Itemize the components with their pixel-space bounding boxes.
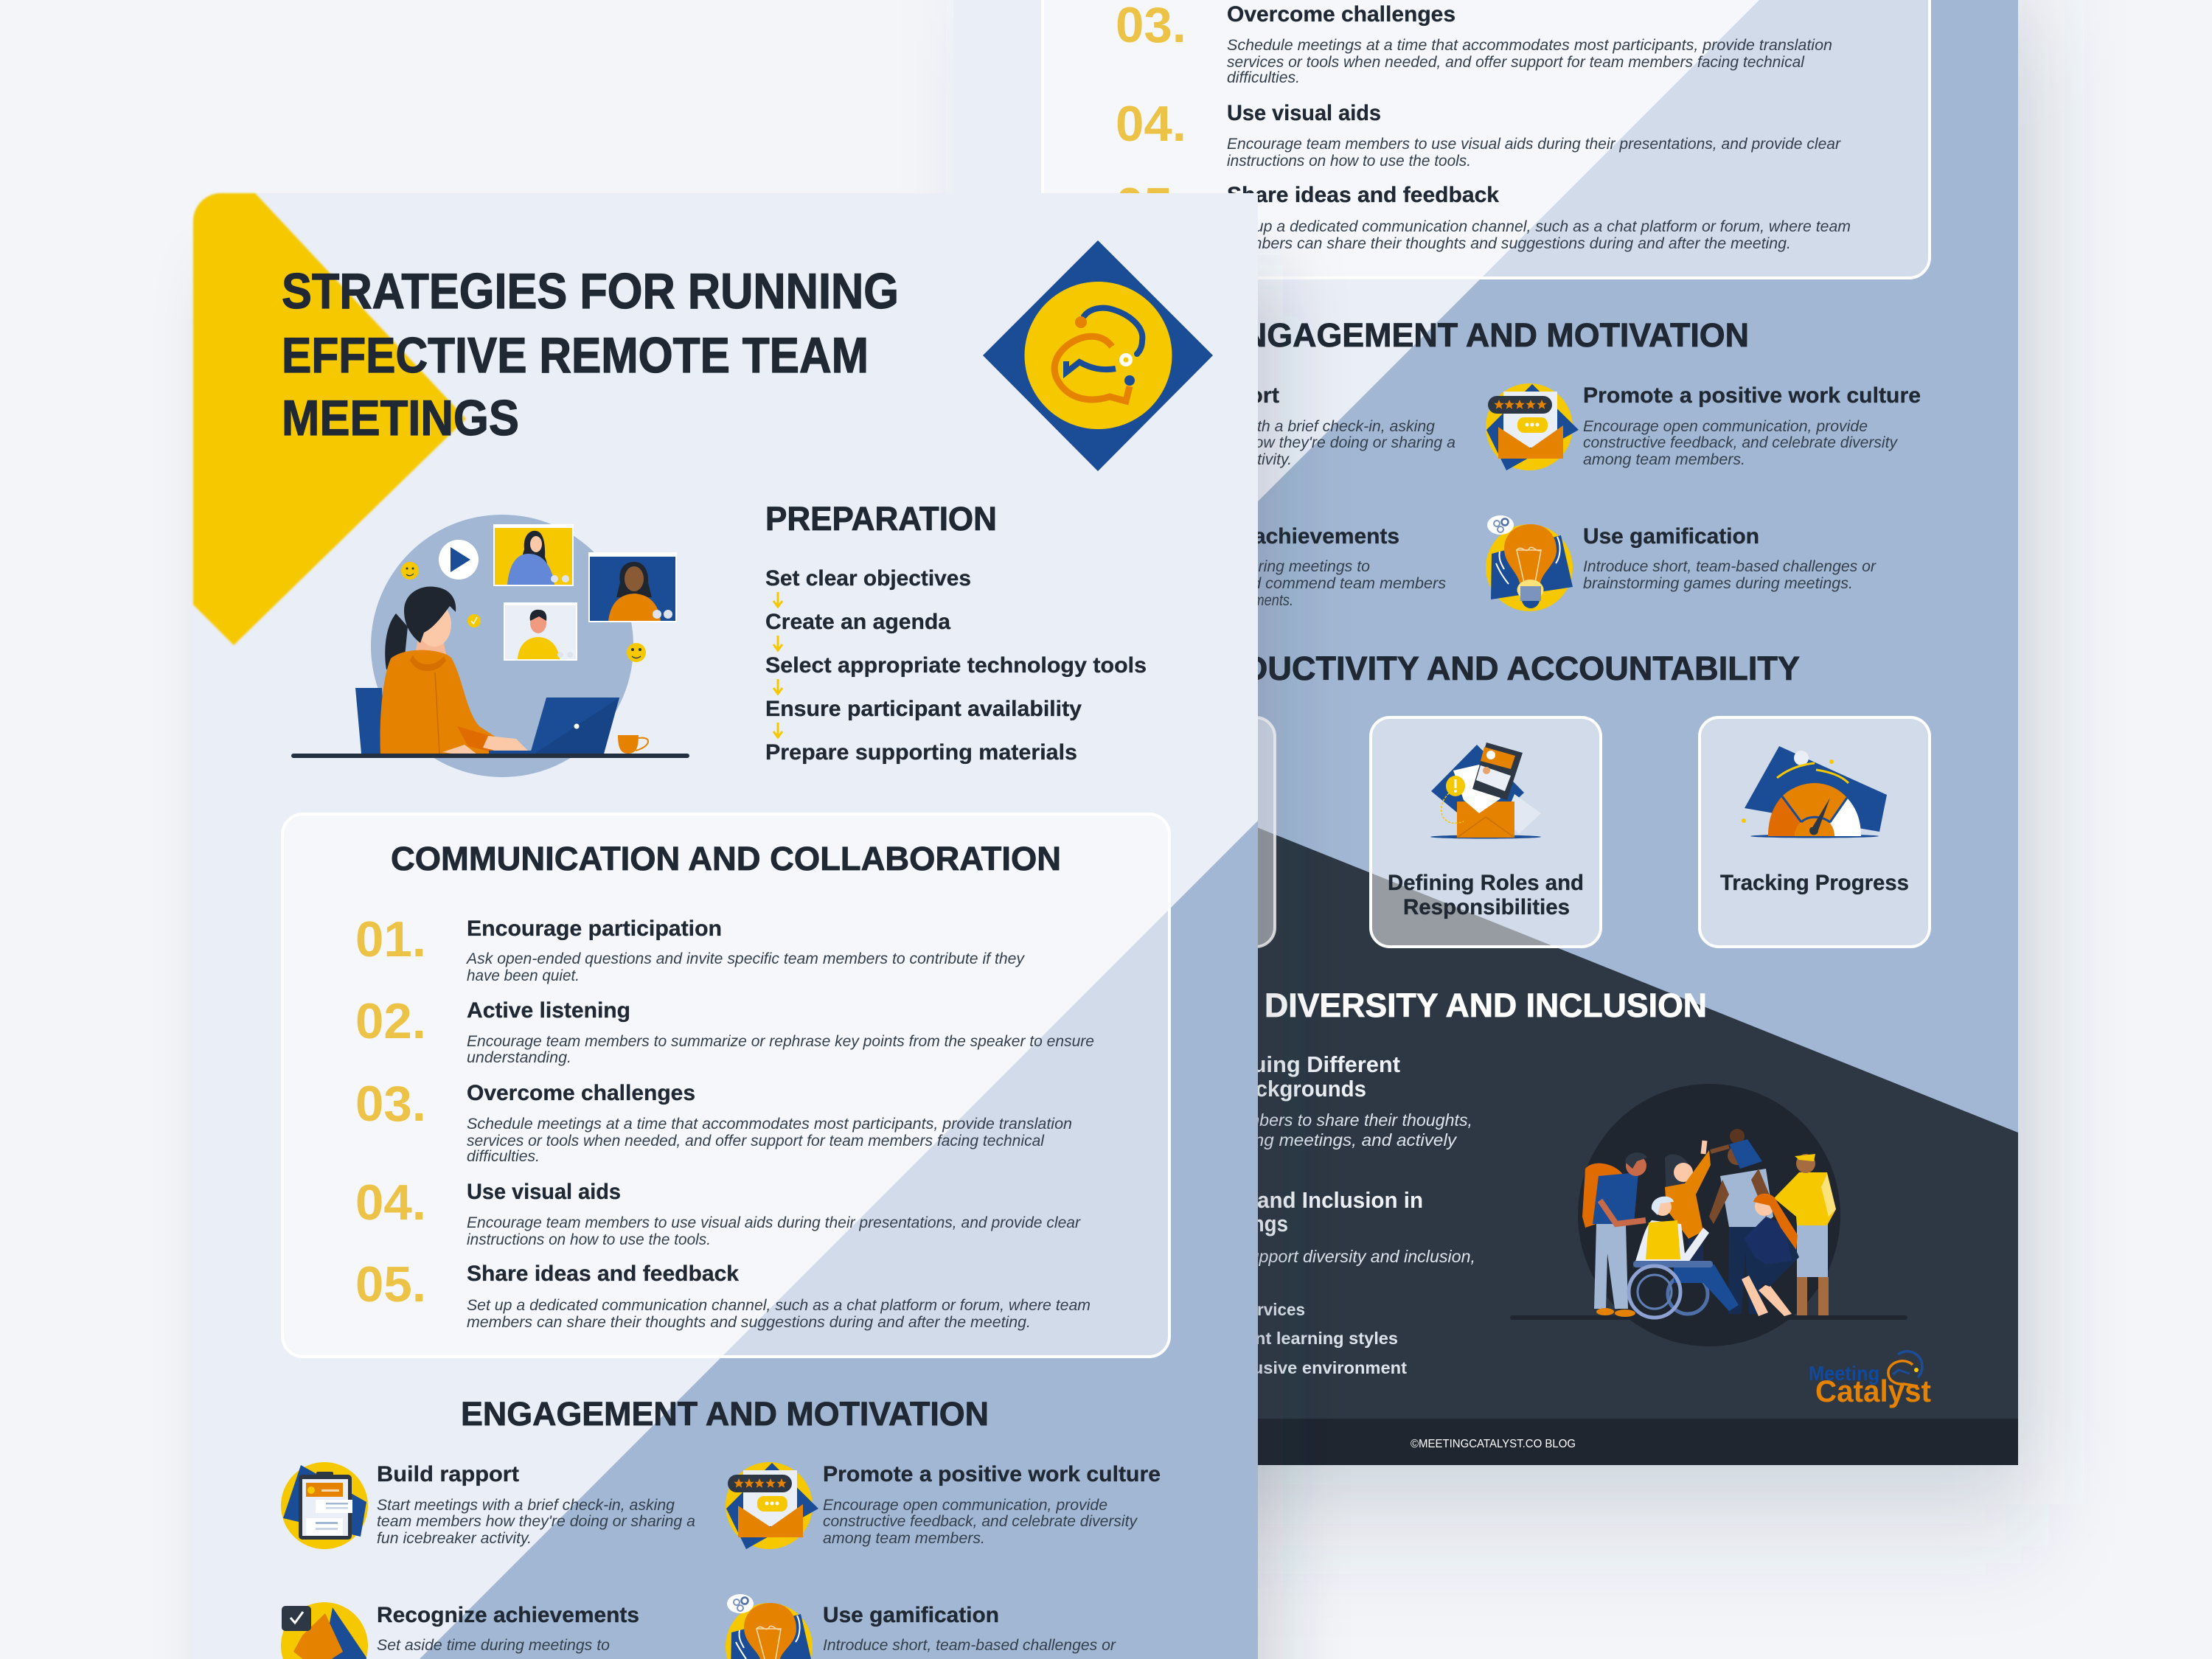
arrow — [773, 679, 782, 694]
logo: Meeting Catalyst wordmark — [1809, 1352, 1931, 1408]
icon: speedometer gauge — [1742, 746, 1887, 838]
title: STRATEGIES FOR RUNNING — [282, 263, 899, 319]
item 05: Share ideas and feedback — [467, 1262, 739, 1286]
illustration: diverse group of people — [1510, 1084, 1907, 1346]
section: back engagement and motivation: Build rapport — [1137, 383, 1279, 408]
section: engagement and motivation: ENGAGEMENT AND MOTIVATION — [461, 1395, 989, 1433]
panel: back communication and collaboration box: difficulties. — [1227, 69, 1300, 86]
item 03: Schedule meetings at a time that accommodates most participants, provide translation — [467, 1116, 1072, 1133]
section: back engagement and motivation: ENGAGEMENT AND MOTIVATION — [1221, 316, 1749, 354]
video tile: woman on blue — [588, 552, 677, 622]
section: back engagement and motivation: fun icebreaker activity. — [1137, 451, 1292, 468]
icon: check badge — [467, 614, 481, 627]
section: back engagement and motivation: Recognize achievements — [1137, 524, 1399, 549]
icon: play button — [439, 540, 479, 580]
section: preparation: Select appropriate technology tools — [765, 653, 1147, 678]
item 02: understanding. — [467, 1049, 571, 1066]
text block: valuing different backgrounds: Encourage team members to share their thoughts, — [1091, 1110, 1472, 1130]
item 01: Encourage participation — [467, 917, 722, 941]
arrow — [773, 636, 782, 650]
emoji: wink — [401, 562, 419, 580]
item: build rapport: Start meetings with a brief check-in, asking — [377, 1497, 675, 1514]
video tile: woman on yellow — [493, 524, 574, 586]
panel: back poster — [953, 0, 2018, 1465]
section: back engagement and motivation: Introduce short, team-based challenges or — [1583, 558, 1877, 575]
heading: diversity and inclusion: DIVERSITY AND INCLUSION — [1265, 987, 1707, 1024]
arrow — [773, 592, 782, 607]
panel: back communication and collaboration box: Use visual aids — [1227, 101, 1381, 125]
item: use gamification — [823, 1603, 1116, 1654]
item 05 — [355, 1256, 1091, 1331]
panel: defining roles card — [1371, 717, 1601, 947]
arrow — [773, 723, 782, 737]
panel: tracking progress card — [1700, 717, 1930, 947]
text: responsibilities label: Responsibilities — [1403, 895, 1570, 919]
item 02: 02. — [355, 993, 426, 1049]
item: recognize achievements — [377, 1603, 639, 1654]
item 01: 01. — [355, 911, 426, 967]
coffee cup — [618, 735, 648, 754]
item 01: have been quiet. — [467, 967, 580, 984]
text block: valuing different backgrounds — [1091, 1051, 1472, 1150]
section: preparation — [765, 500, 1147, 765]
item: promote a positive work culture: Promote a positive work culture — [823, 1462, 1161, 1486]
panel: back communication and collaboration box: Overcome challenges — [1227, 2, 1455, 27]
item 04: Encourage team members to use visual aids during their presentations, and provide clear — [467, 1214, 1081, 1231]
text: tracking progress label: Tracking Progress — [1720, 871, 1909, 895]
item 02 — [355, 993, 1094, 1066]
panel: card left (clipped) — [1042, 717, 1275, 947]
text block: valuing different backgrounds: opinions during meetings, and actively — [1152, 1130, 1458, 1150]
heading: COMMUNICATION AND COLLABORATION — [391, 840, 1061, 877]
item 04: Use visual aids — [467, 1180, 621, 1204]
item: build rapport — [377, 1462, 695, 1547]
item: promote a positive work culture: Encourage open communication, provide — [823, 1497, 1107, 1514]
decoration: yellow corner shape — [193, 193, 466, 645]
section: back engagement and motivation: constructive feedback, and celebrate diversity — [1583, 434, 1898, 451]
laptop — [489, 698, 619, 754]
text block: valuing different backgrounds: Valuing Different — [1220, 1051, 1400, 1077]
section: back engagement and motivation: team members how they're doing or sharing a — [1137, 434, 1455, 451]
item 05: members can share their thoughts and suggestions during and after the meeting. — [467, 1314, 1031, 1331]
woman at desk — [355, 587, 528, 756]
elderly man in wheelchair — [1629, 1197, 1739, 1318]
item: use gamification: Use gamification — [823, 1603, 999, 1627]
text block: diversity and inclusion in meetings: different learning styles — [1202, 1329, 1398, 1348]
video tile: man on white — [504, 602, 577, 661]
heading: productivity and accountability: PRODUCTIVITY AND ACCOUNTABILITY — [1172, 650, 1800, 687]
section: back engagement and motivation: Use gamification — [1583, 524, 1759, 549]
panel: back communication and collaboration box: Schedule meetings at a time that accommodates most participants, provide translation — [1227, 37, 1832, 54]
section: preparation: Ensure participant availability — [765, 697, 1082, 721]
item 05: 05. — [355, 1256, 426, 1312]
icon: Meeting Catalyst logo badge — [983, 240, 1213, 471]
logo: Meeting Catalyst wordmark: Catalyst — [1815, 1374, 1931, 1408]
text block: diversity and inclusion in meetings: services — [1239, 1300, 1305, 1319]
section: preparation: PREPARATION — [765, 500, 997, 538]
text block: diversity and inclusion in meetings — [1159, 1187, 1475, 1377]
panel: back communication and collaboration box: instructions on how to use the tools. — [1227, 153, 1471, 170]
section: preparation: Set clear objectives — [765, 566, 971, 591]
section: back engagement and motivation: among team members. — [1583, 451, 1745, 468]
section: back engagement and motivation: Start meetings with a brief check-in, asking — [1137, 418, 1435, 435]
section: back engagement and motivation: Promote a positive work culture — [1583, 383, 1921, 408]
item 03: difficulties. — [467, 1148, 540, 1165]
item 02: Active listening — [467, 998, 630, 1023]
item 03: Overcome challenges — [467, 1081, 695, 1105]
section: back engagement and motivation: brainstorming games during meetings. — [1583, 575, 1853, 592]
panel: back communication and collaboration box: Set up a dedicated communication channel, such as a chat platform or forum, where team — [1227, 218, 1851, 235]
item 03 — [355, 1076, 1072, 1165]
icon: light bulb — [726, 1594, 813, 1659]
icon: megaphone — [281, 1602, 368, 1659]
section: preparation: Prepare supporting materials — [765, 740, 1077, 765]
item 03: services or tools when needed, and offer support for team members facing technical — [467, 1133, 1045, 1150]
item: build rapport: team members how they're doing or sharing a — [377, 1513, 695, 1530]
text: defining roles label: Defining Roles and — [1388, 871, 1584, 895]
text block: diversity and inclusion in meetings: Diversity and Inclusion in — [1159, 1187, 1423, 1213]
item: recognize achievements: Set aside time during meetings to — [377, 1637, 610, 1654]
section: back engagement and motivation: Encourage open communication, provide — [1583, 418, 1868, 435]
man with backpack — [1582, 1152, 1647, 1317]
item 04: instructions on how to use the tools. — [467, 1231, 711, 1248]
item 05: Set up a dedicated communication channel, such as a chat platform or forum, where team — [467, 1297, 1091, 1314]
item: promote a positive work culture: among team members. — [823, 1530, 985, 1547]
text block: diversity and inclusion in meetings: Meetings — [1200, 1211, 1288, 1237]
woman crouching — [1742, 1194, 1799, 1316]
item: build rapport: fun icebreaker activity. — [377, 1530, 532, 1547]
icon: envelope with rating — [726, 1462, 818, 1549]
text block: diversity and inclusion in meetings: inclusive environment — [1222, 1358, 1407, 1377]
item 01: Ask open-ended questions and invite specific team members to contribute if they — [465, 950, 1025, 967]
item 01 — [355, 911, 1025, 984]
emoji: smile — [627, 643, 646, 662]
footer text: ©MEETINGCATALYST.CO BLOG — [1411, 1438, 1576, 1450]
title: MEETINGS — [282, 390, 519, 446]
panel: back communication and collaboration box: Share ideas and feedback — [1227, 183, 1499, 207]
man in yellow hoodie — [1774, 1154, 1836, 1315]
man carrying child — [1709, 1129, 1775, 1314]
title — [282, 263, 899, 446]
icon: clipboard — [281, 1462, 368, 1549]
icon: envelope with documents — [1430, 742, 1541, 839]
section: back engagement and motivation: acknowledge and commend team members — [1137, 575, 1447, 592]
woman with raised arm — [1665, 1141, 1711, 1276]
item: build rapport: Build rapport — [377, 1462, 519, 1486]
item: use gamification: Introduce short, team-based challenges or — [823, 1637, 1116, 1654]
panel: front poster — [193, 193, 1258, 1659]
title: EFFECTIVE REMOTE TEAM — [282, 327, 869, 383]
panel: back communication and collaboration box: services or tools when needed, and offer support for team members facing technical — [1227, 54, 1805, 71]
illustration: woman on video call — [291, 515, 689, 777]
section: preparation: Create an agenda — [765, 610, 950, 634]
item 03: 03. — [355, 1076, 426, 1132]
section: back engagement and motivation: for their accomplishments. — [1137, 592, 1293, 609]
panel: back communication and collaboration box: 04. — [1116, 96, 1186, 152]
item: recognize achievements: Recognize achievements — [377, 1603, 639, 1627]
panel: communication and collaboration — [282, 814, 1169, 1357]
section: back engagement and motivation — [1137, 316, 1921, 611]
panel: back communication and collaboration box: 05. — [1116, 178, 1186, 234]
logo: Meeting Catalyst wordmark: Meeting — [1809, 1362, 1879, 1385]
section: back engagement and motivation: Set aside time during meetings to — [1137, 558, 1370, 575]
item: promote a positive work culture: constructive feedback, and celebrate diversity — [823, 1513, 1138, 1530]
text block: diversity and inclusion in meetings: support diversity and inclusion, — [1241, 1247, 1475, 1266]
item 04 — [355, 1175, 1081, 1248]
text block: valuing different backgrounds: Backgrounds — [1228, 1076, 1366, 1102]
panel: back communication and collaboration box: members can share their thoughts and suggestions during and after the meeting. — [1227, 235, 1791, 252]
item: promote a positive work culture — [823, 1462, 1161, 1547]
panel: back communication and collaboration box: Encourage team members to use visual aids during their presentations, and provide clear — [1227, 136, 1841, 153]
item 02: Encourage team members to summarize or rephrase key points from the speaker to ensure — [467, 1033, 1094, 1050]
section: engagement and motivation — [281, 1395, 1161, 1659]
item 04: 04. — [355, 1175, 426, 1231]
panel: back communication and collaboration box — [1043, 0, 1930, 278]
